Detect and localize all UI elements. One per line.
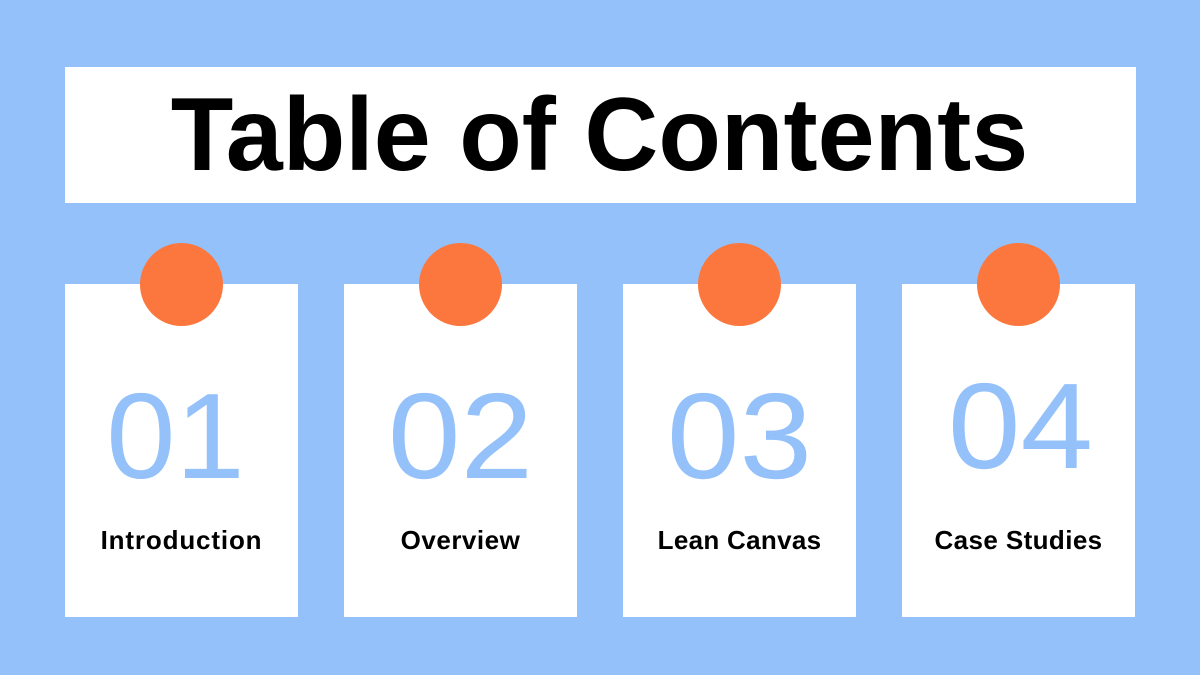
number 03: 03	[667, 368, 812, 504]
panel: card 02 Overview	[344, 284, 577, 617]
number 04: 04	[948, 358, 1093, 494]
panel: card 01 Introduction	[65, 284, 298, 617]
title banner	[65, 67, 1136, 203]
icon: orange pin 4	[977, 243, 1060, 326]
number 02: 02	[388, 368, 533, 504]
label: Case Studies: Case Studies	[934, 525, 1103, 555]
panel: card 03 Lean Canvas	[623, 284, 856, 617]
label: Introduction: Introduction	[101, 525, 262, 555]
panel: card 04 Case Studies	[902, 284, 1135, 617]
label: Overview: Overview	[401, 525, 520, 555]
icon: orange pin 3	[698, 243, 781, 326]
label: Lean Canvas: Lean Canvas	[658, 525, 821, 555]
icon: orange pin 2	[419, 243, 502, 326]
icon: orange pin 1	[140, 243, 223, 326]
title: Table of Contents	[171, 77, 1028, 193]
number 01: 01	[106, 368, 245, 504]
